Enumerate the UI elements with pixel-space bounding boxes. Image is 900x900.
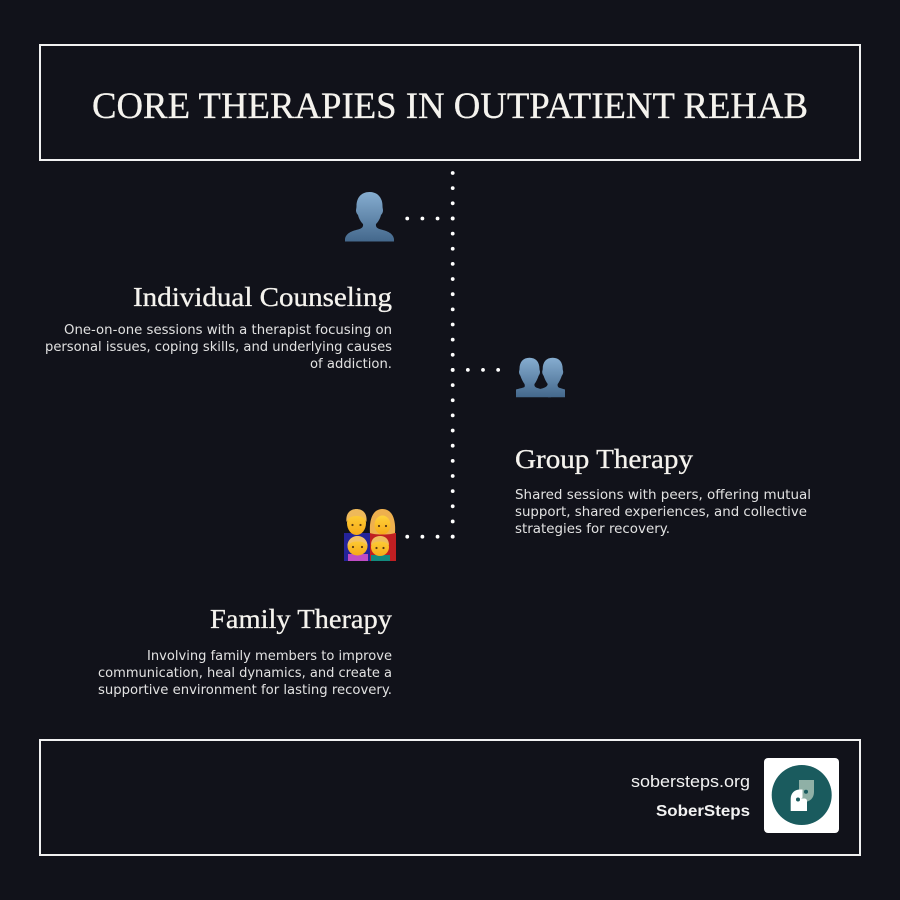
logo xyxy=(764,758,839,833)
footer panel xyxy=(40,740,860,855)
description: of addiction. xyxy=(310,356,392,372)
title: CORE THERAPIES IN OUTPATIENT REHAB xyxy=(92,86,808,127)
website url: sobersteps.org xyxy=(631,773,750,791)
brand name: SoberSteps xyxy=(656,803,750,820)
description xyxy=(45,322,392,372)
description: support, shared experiences, and collective xyxy=(515,504,807,520)
description: One-on-one sessions with a therapist focusing on xyxy=(64,322,392,338)
description: supportive environment for lasting recovery. xyxy=(98,682,392,698)
description: communication, heal dynamics, and create a xyxy=(98,665,392,681)
heading: Individual Counseling xyxy=(133,282,392,312)
description: Involving family members to improve xyxy=(147,648,392,664)
title banner xyxy=(40,45,860,160)
description: strategies for recovery. xyxy=(515,521,670,537)
description xyxy=(515,487,811,537)
description xyxy=(98,648,392,698)
icon: family xyxy=(344,509,396,561)
heading: Group Therapy xyxy=(515,444,694,474)
icon: two people xyxy=(516,358,565,397)
icon: single person xyxy=(345,192,394,242)
section: family therapy xyxy=(98,604,393,698)
dotted timeline xyxy=(405,173,500,538)
heading: Family Therapy xyxy=(210,604,393,634)
description: personal issues, coping skills, and underlying causes xyxy=(45,339,392,355)
section: individual counseling xyxy=(45,282,392,372)
description: Shared sessions with peers, offering mutual xyxy=(515,487,811,503)
section: group therapy xyxy=(515,444,811,537)
